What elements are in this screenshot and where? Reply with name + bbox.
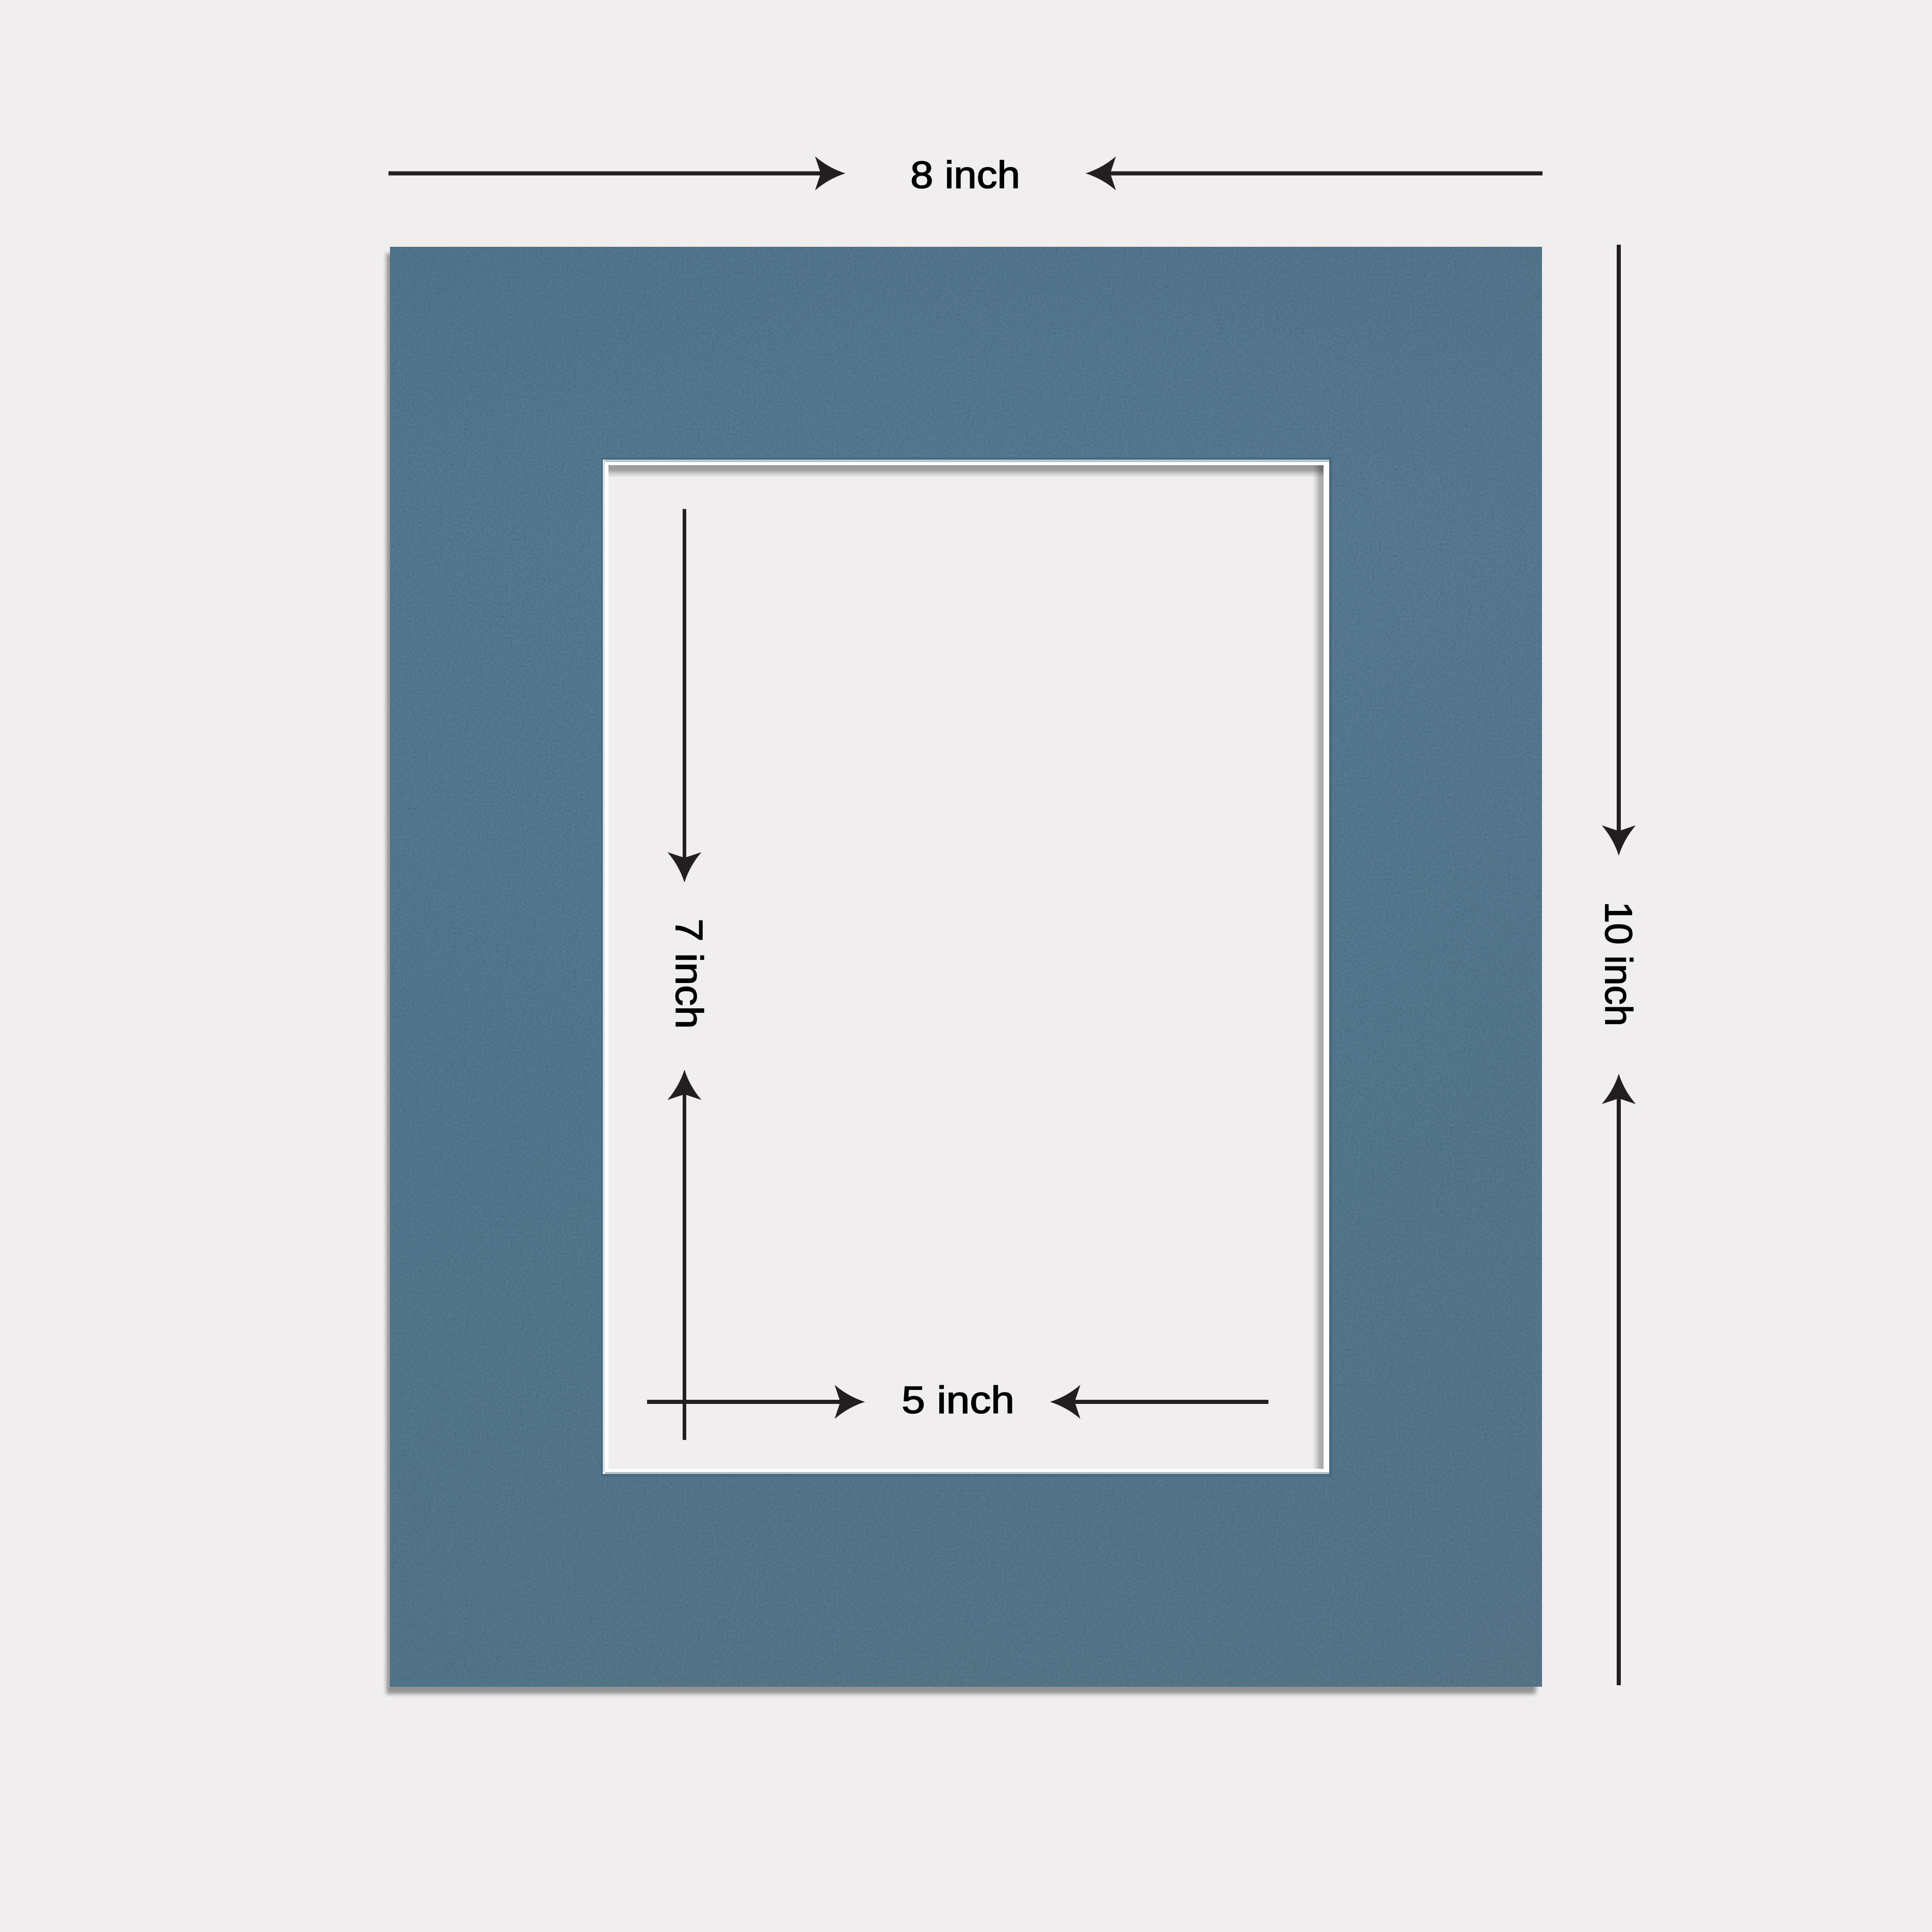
arrow: inner bottom right, pointing left — [1050, 1385, 1268, 1419]
arrow: right side top, pointing down — [1602, 245, 1636, 856]
label: 7 inch height: 7 inch — [668, 919, 710, 1029]
mat surface — [390, 247, 1542, 1687]
label: 8 inch width: 8 inch — [910, 154, 1020, 196]
arrow: right side bottom, pointing up — [1602, 1074, 1636, 1685]
arrow: inner bottom left, pointing right — [647, 1385, 865, 1419]
label: 5 inch width: 5 inch — [902, 1379, 1014, 1421]
arrow: inner left bottom, pointing up — [668, 1070, 702, 1440]
arrow: top left, pointing right — [388, 157, 845, 191]
panel: blue mat board — [386, 247, 1542, 1694]
arrow: inner left top, pointing down — [668, 509, 702, 883]
window opening with bevel — [601, 457, 1332, 1477]
arrow: top right, pointing left — [1086, 157, 1543, 191]
mat drop shadow — [386, 253, 1536, 1694]
label: 10 inch height: 10 inch — [1597, 902, 1640, 1026]
